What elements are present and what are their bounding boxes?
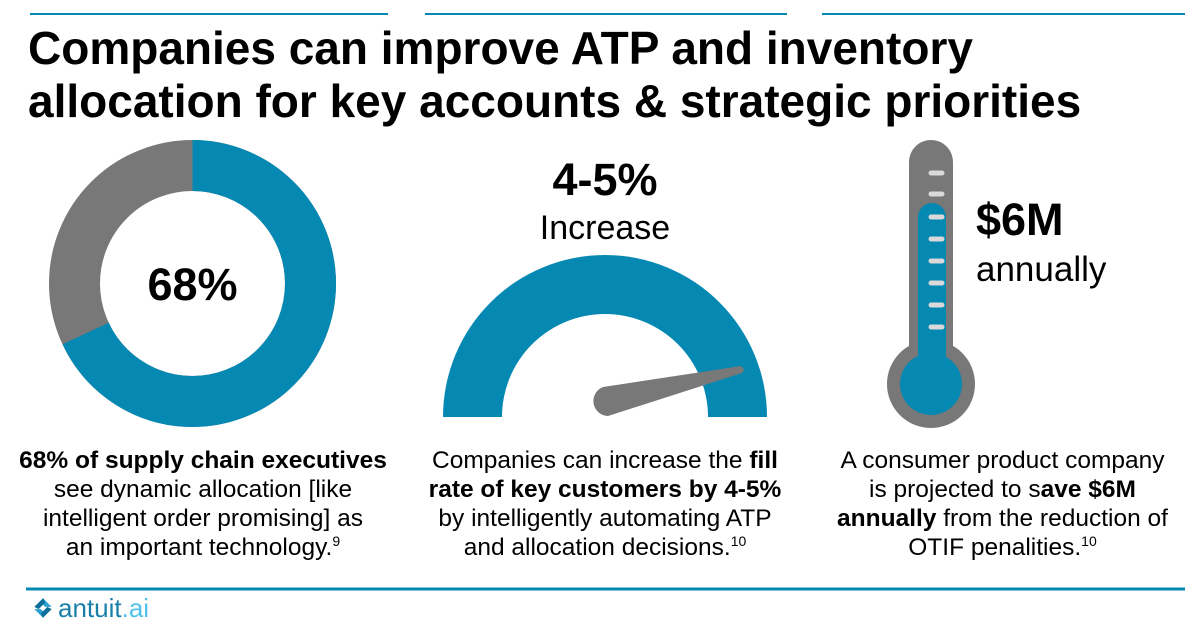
text: middle caption: by intelligently automating ATP: [438, 505, 772, 532]
text: middle caption: and allocation decisions.10: [464, 533, 746, 561]
text: left caption: see dynamic allocation [like: [54, 476, 352, 503]
text: left caption: 68% of supply chain executives: [19, 447, 387, 474]
icon: thermometer: [887, 140, 975, 428]
title: Companies can improve ATP and inventory: [28, 22, 973, 74]
logo: antuit: [58, 593, 122, 623]
logo: [34, 593, 149, 623]
text: left caption: intelligent order promising] as: [43, 505, 363, 532]
text: middle caption: [429, 447, 781, 561]
title: [28, 22, 1081, 127]
text: right caption: [837, 447, 1168, 561]
stat: 4-5% increase: [540, 154, 670, 247]
text: right caption: is projected to save $6M: [869, 476, 1136, 503]
text: middle caption: Companies can increase the fill: [432, 447, 778, 474]
text: left caption: [19, 447, 387, 561]
text: right caption: OTIF penalities.10: [908, 533, 1097, 561]
text: middle caption: rate of key customers by 4-5%: [429, 476, 781, 503]
donut chart: [74, 166, 310, 402]
text: right caption: annually from the reduction of: [837, 505, 1168, 532]
stat: $6M annually: annually: [976, 250, 1106, 289]
stat: 4-5% increase: Increase: [540, 209, 670, 247]
logo: .ai: [122, 593, 149, 623]
text: right caption: A consumer product company: [840, 447, 1165, 474]
stat: $6M annually: $6M: [976, 194, 1064, 245]
title: allocation for key accounts & strategic priorities: [28, 75, 1081, 127]
stat: $6M annually: [976, 194, 1106, 289]
stat: 4-5% increase: 4-5%: [552, 154, 658, 205]
gauge: [443, 255, 767, 417]
text: left caption: an important technology.9: [66, 533, 340, 561]
donut chart: 68%: [147, 259, 238, 310]
